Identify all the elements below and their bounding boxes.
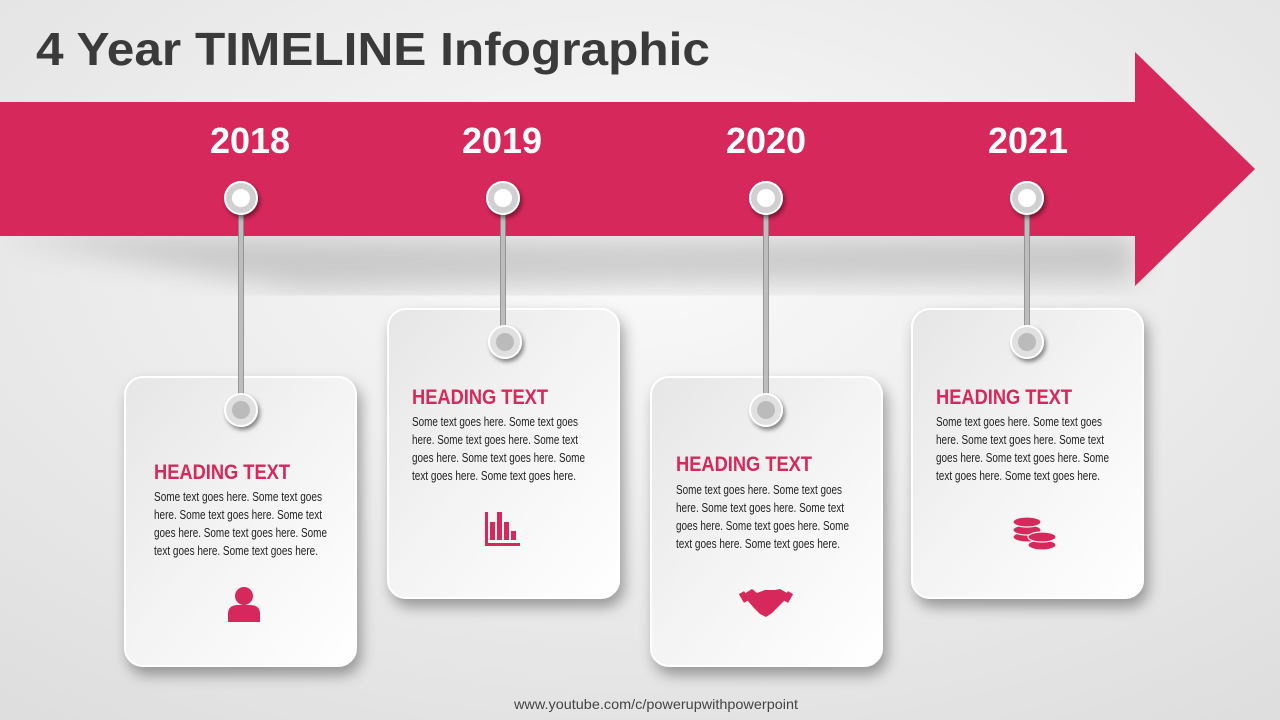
year labels: 2020 <box>726 120 806 161</box>
heading 4: HEADING TEXT <box>936 386 1072 409</box>
arrow: timeline band <box>0 52 1255 286</box>
body 1 <box>154 490 327 558</box>
heading 1: HEADING TEXT <box>154 461 290 484</box>
year labels: 2019 <box>462 120 542 161</box>
card 2 <box>388 309 619 598</box>
icon: handshake <box>739 589 793 617</box>
title: 4 Year TIMELINE Infographic <box>36 23 710 75</box>
body 4: here. Some text goes here. Some text <box>936 433 1104 447</box>
body 2: goes here. Some text goes here. Some <box>412 451 585 465</box>
body 4: Some text goes here. Some text goes <box>936 415 1102 429</box>
arrow shadow <box>0 236 1135 290</box>
body 4: goes here. Some text goes here. Some <box>936 451 1109 465</box>
body 2 <box>412 415 585 483</box>
body 3 <box>676 483 849 551</box>
heading 3: HEADING TEXT <box>676 453 812 476</box>
body 1: goes here. Some text goes here. Some <box>154 526 327 540</box>
body 1: text goes here. Some text goes here. <box>154 544 318 558</box>
card 3 <box>651 377 882 666</box>
body 1: Some text goes here. Some text goes <box>154 490 322 504</box>
heading 2: HEADING TEXT <box>412 386 548 409</box>
year labels <box>210 120 1068 161</box>
body 4: text goes here. Some text goes here. <box>936 469 1100 483</box>
year labels: 2018 <box>210 120 290 161</box>
body 2: text goes here. Some text goes here. <box>412 469 576 483</box>
card 1 <box>125 377 356 666</box>
body 3: text goes here. Some text goes here. <box>676 537 840 551</box>
body 3: Some text goes here. Some text goes <box>676 483 842 497</box>
body 2: here. Some text goes here. Some text <box>412 433 578 447</box>
footer url: www.youtube.com/c/powerupwithpowerpoint <box>513 696 798 712</box>
icon: coins <box>1013 517 1056 550</box>
body 3: goes here. Some text goes here. Some <box>676 519 849 533</box>
pins with strings <box>225 182 1043 426</box>
icon: person <box>228 587 260 622</box>
body 2: Some text goes here. Some text goes <box>412 415 578 429</box>
body 3: here. Some text goes here. Some text <box>676 501 844 515</box>
body 1: here. Some text goes here. Some text <box>154 508 322 522</box>
card 4 <box>912 309 1143 598</box>
body 4 <box>936 415 1109 483</box>
year labels: 2021 <box>988 120 1068 161</box>
icon: bar chart <box>485 512 520 546</box>
